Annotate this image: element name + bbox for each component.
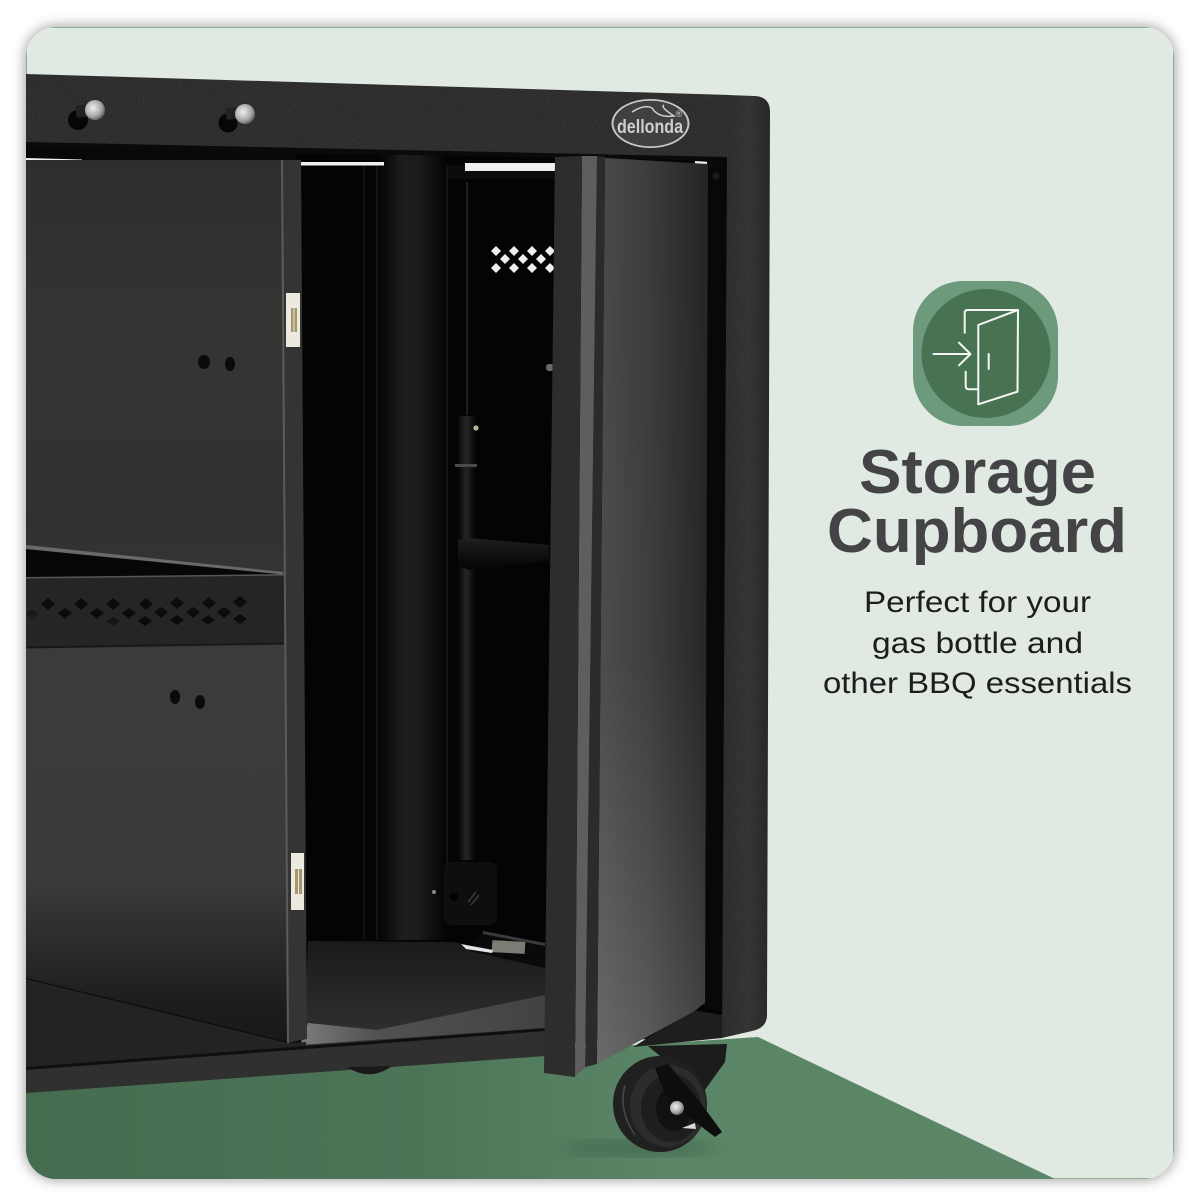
cabinet product photo xyxy=(25,74,770,1152)
castor wheel xyxy=(613,1044,727,1152)
left door edge xyxy=(281,160,307,1043)
mounting knobs xyxy=(68,100,255,132)
door screws xyxy=(170,355,235,709)
shelf xyxy=(25,545,284,648)
dellonda logo badge: dellonda xyxy=(617,117,683,138)
bottom corner bracket xyxy=(633,1010,722,1047)
door outer edge xyxy=(544,156,582,1077)
heading: Cupboard xyxy=(827,497,1127,566)
rear gas pipe xyxy=(460,416,474,470)
channel beside door xyxy=(707,158,727,886)
rear frame xyxy=(446,165,555,179)
heading xyxy=(830,450,1123,565)
door main panel xyxy=(597,158,708,1064)
heading: Storage xyxy=(859,438,1096,507)
pillar xyxy=(386,155,436,940)
cabinet interior xyxy=(301,155,554,1046)
right corner post xyxy=(722,95,770,1038)
rear perforations xyxy=(491,246,554,273)
shelf perforations xyxy=(25,596,247,626)
description text: other BBQ essentials xyxy=(823,667,1132,700)
dellonda logo badge: ® xyxy=(676,109,683,119)
slide rail xyxy=(470,950,542,968)
left door inner face xyxy=(26,160,288,1042)
interior floor xyxy=(304,941,545,1046)
green floor xyxy=(26,1037,1055,1179)
bracket plate xyxy=(444,862,497,925)
open door xyxy=(544,156,708,1077)
icon: door with entry arrow xyxy=(913,281,1058,426)
bottom rail xyxy=(26,1027,560,1093)
description text xyxy=(823,586,1132,700)
door inner dark strip xyxy=(585,156,605,1067)
description text: gas bottle and xyxy=(872,627,1083,660)
rubber foot xyxy=(347,1066,392,1074)
dellonda logo badge xyxy=(612,99,690,148)
description text: Perfect for your xyxy=(864,586,1091,619)
door light strip xyxy=(575,156,597,1076)
floor mat xyxy=(26,979,306,1069)
cabinet dark backing xyxy=(26,148,650,1046)
white light strips xyxy=(26,158,711,171)
magnetic latches xyxy=(286,293,304,910)
top rail xyxy=(26,74,730,161)
